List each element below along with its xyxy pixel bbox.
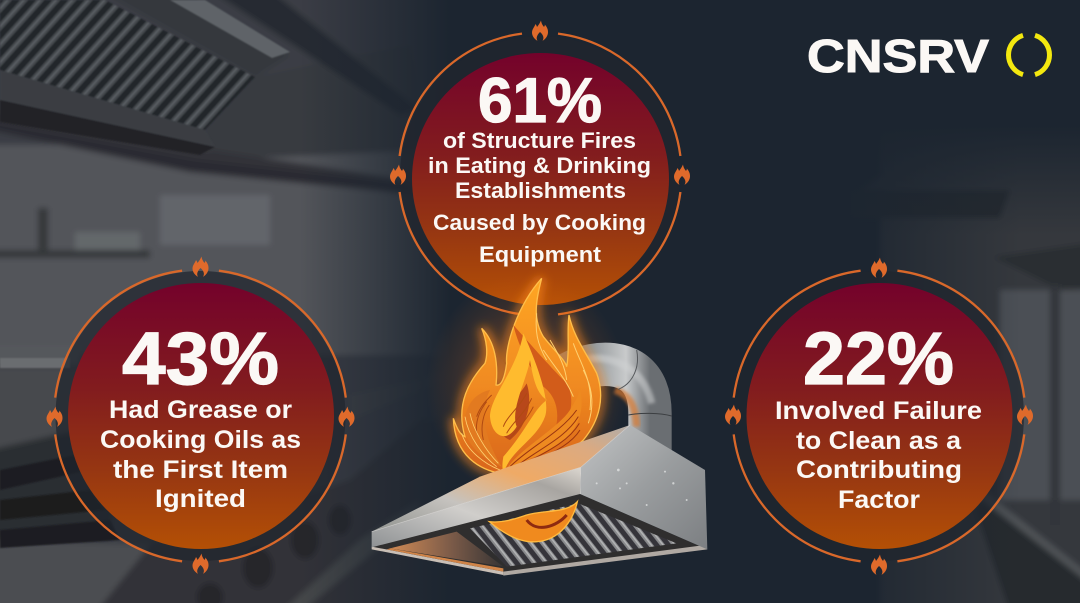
disc <box>68 283 334 549</box>
hood right face <box>580 425 707 549</box>
stat description: Ignited <box>155 485 246 513</box>
flame glow <box>427 273 627 500</box>
stat description: Caused by Cooking <box>433 210 646 235</box>
ring halo <box>734 271 1024 561</box>
stat number: 43% <box>122 317 279 400</box>
ring halo <box>400 36 680 316</box>
ring halo <box>56 271 346 561</box>
stat description: Contributing <box>796 456 962 484</box>
main flame <box>453 278 601 474</box>
stat panel: 61% <box>390 20 690 316</box>
stat number: 61% <box>478 66 602 136</box>
exhaust duct <box>570 350 672 450</box>
logo icon: yellow brackets <box>1009 35 1049 75</box>
stat description: the First Item <box>113 456 288 484</box>
illustration: flaming exhaust hood <box>372 273 707 576</box>
stat description: Factor <box>838 486 920 514</box>
ring with flame icons <box>46 256 355 574</box>
louvered extraction hood in background <box>0 0 290 548</box>
stat description: Had Grease or <box>109 396 292 424</box>
stat panel: 43% <box>46 256 355 574</box>
stat description <box>428 128 651 267</box>
stat number: 22% <box>803 317 954 400</box>
stat description: in Eating & Drinking <box>428 153 651 178</box>
stat description: Involved Failure <box>775 397 982 425</box>
stat description: to Clean as a <box>796 427 962 455</box>
hood underside <box>372 494 707 576</box>
stat panel: 22% <box>725 258 1033 575</box>
ring with flame icons <box>390 20 690 314</box>
ring with flame icons <box>725 258 1033 575</box>
stat description <box>100 396 301 513</box>
disc <box>412 53 669 305</box>
stat description: Establishments <box>455 178 626 203</box>
stat description: Equipment <box>479 242 602 267</box>
logo wordmark: CNSRV <box>807 30 989 82</box>
stat description: Cooking Oils as <box>100 426 301 454</box>
stat description <box>775 397 982 514</box>
hood surface specks <box>596 469 688 506</box>
hood front lip <box>372 467 581 547</box>
hood top panel <box>372 425 630 532</box>
logo: CNSRV <box>807 30 1049 82</box>
hood edge highlights <box>372 425 630 532</box>
disc <box>746 283 1012 549</box>
stat description: of Structure Fires <box>443 128 636 153</box>
